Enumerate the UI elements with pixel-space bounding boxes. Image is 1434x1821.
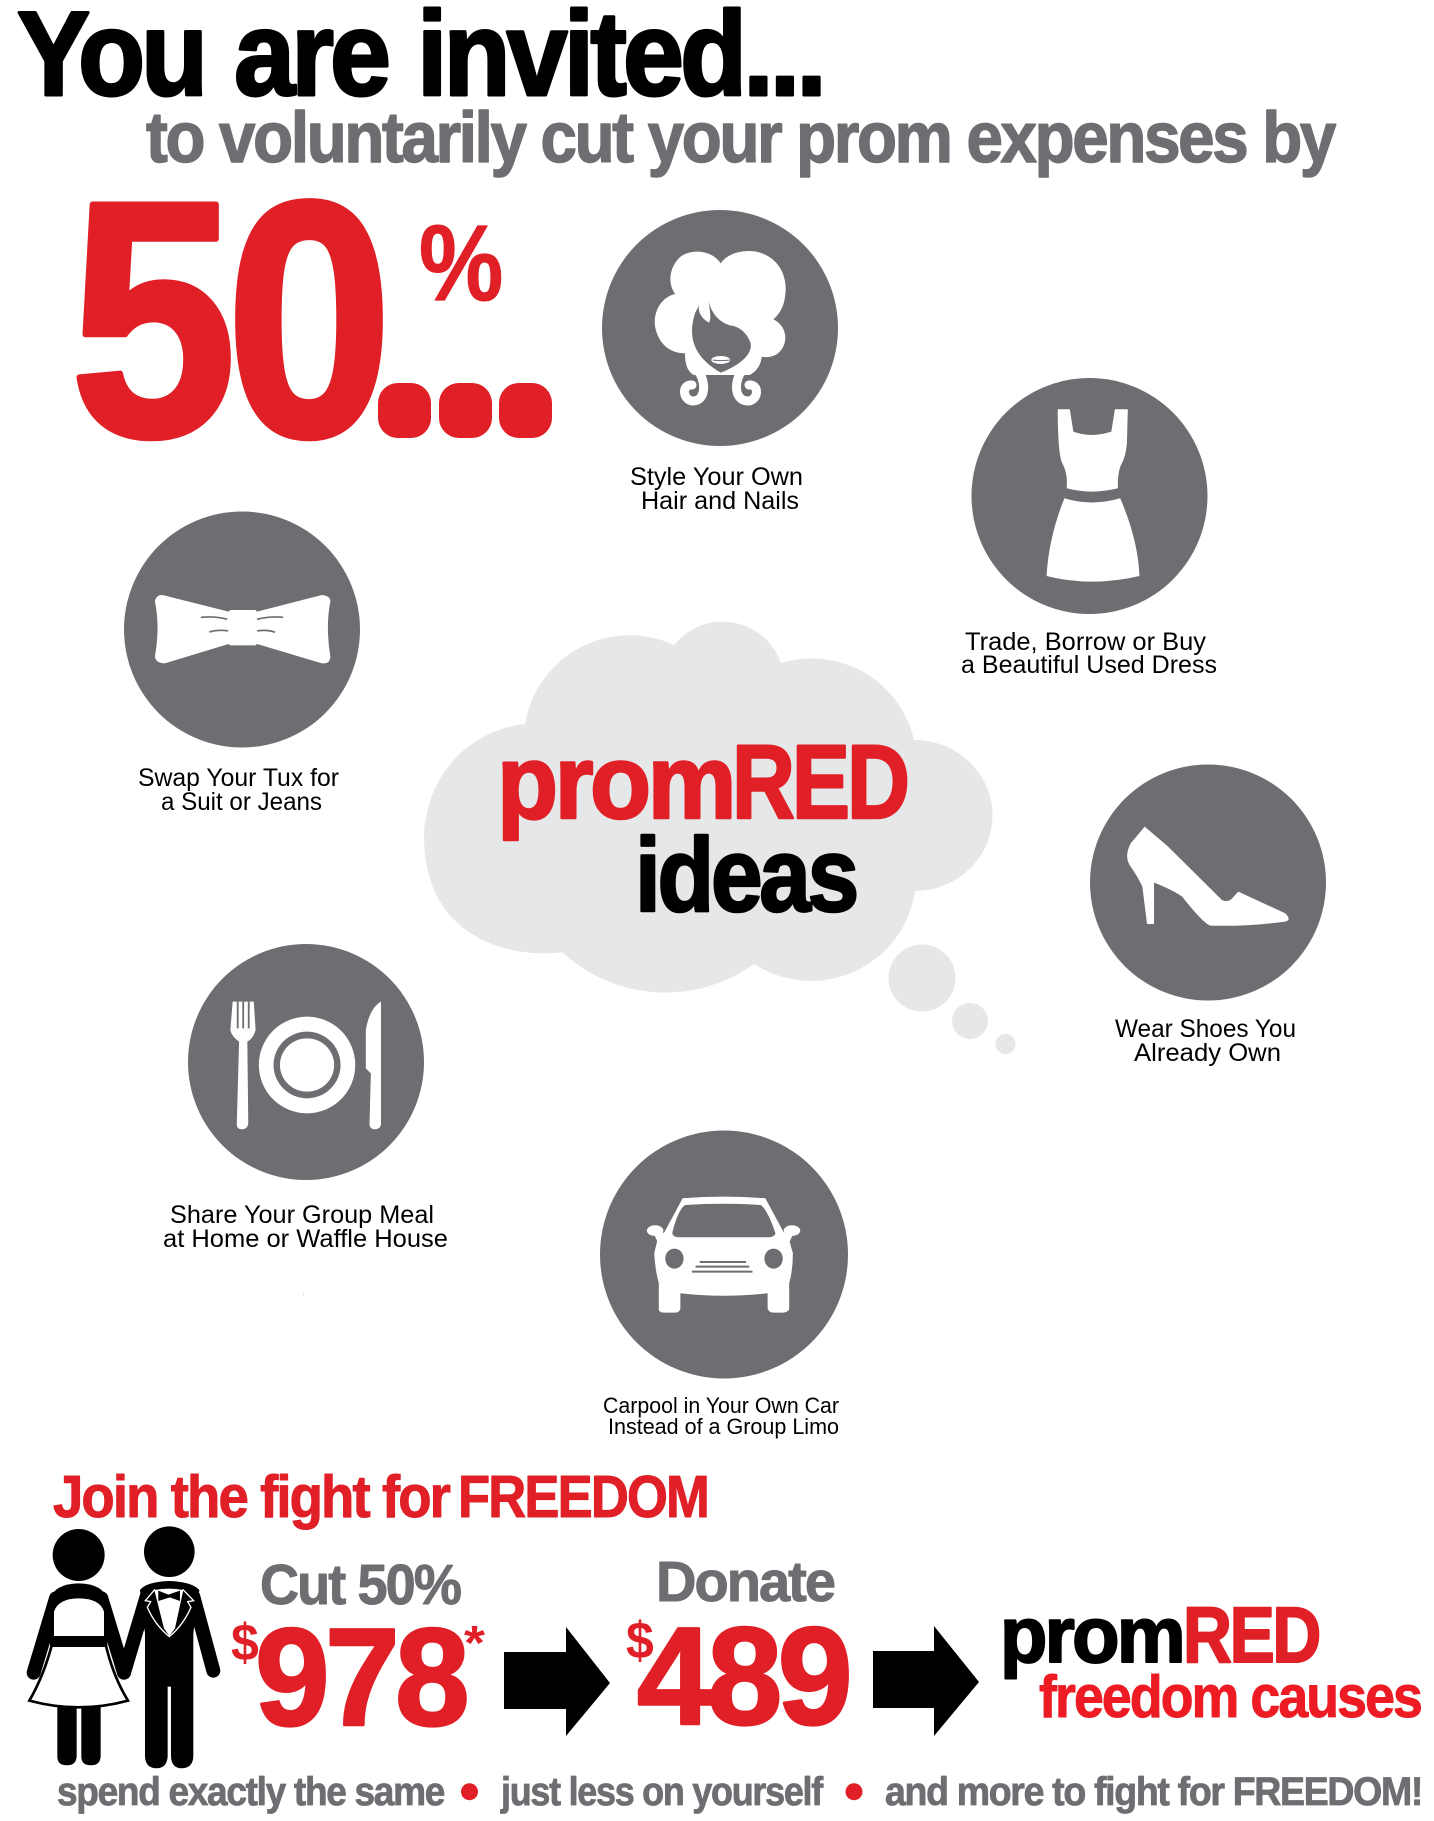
label: Swap Your Tux for <box>138 764 339 792</box>
label: Carpool in Your Own Car <box>603 1393 839 1418</box>
idea: group meal <box>163 944 448 1253</box>
bottom tagline: spend exactly the same <box>57 1770 444 1814</box>
idea: shoes <box>1090 764 1326 1067</box>
icon: plate and cutlery <box>230 1002 381 1129</box>
idea: carpool <box>600 1130 848 1439</box>
thought cloud <box>424 622 1016 1054</box>
label <box>138 764 339 816</box>
label <box>163 1201 448 1253</box>
cloud heading: promRED: prom <box>497 724 733 841</box>
label: Trade, Borrow or Buy <box>965 628 1206 656</box>
cloud heading: ideas: ideas <box>635 817 856 934</box>
big statistic: 50%...: % <box>419 202 502 323</box>
cut 50% block <box>231 1553 485 1755</box>
label <box>961 628 1217 679</box>
man <box>124 1526 213 1768</box>
section heading: join the fight <box>53 1464 708 1530</box>
section heading: join the fight: Join the fight for <box>53 1464 451 1530</box>
promRED freedom causes logo: prom <box>1000 1590 1183 1679</box>
icon: high heel <box>1127 827 1289 926</box>
label: Style Your Own <box>630 463 803 491</box>
icon: couple <box>29 1526 213 1768</box>
label <box>630 463 803 515</box>
label: Already Own <box>1134 1039 1281 1067</box>
label: Share Your Group Meal <box>170 1201 434 1229</box>
label: Hair and Nails <box>641 487 799 515</box>
icon: bow tie <box>155 595 330 663</box>
idea: used dress <box>961 378 1217 679</box>
price: 978: * <box>464 1617 485 1670</box>
label <box>1115 1015 1296 1067</box>
donate block: Donate <box>656 1550 834 1614</box>
donate block <box>626 1550 849 1754</box>
icon: car <box>647 1197 800 1313</box>
cut 50% block: Cut 50% <box>260 1553 461 1617</box>
cloud heading: promRED: RED <box>732 724 907 841</box>
label: Instead of a Group Limo <box>608 1414 839 1439</box>
arrow: cut to donate <box>504 1627 610 1736</box>
promRED freedom causes logo: RED <box>1183 1590 1319 1679</box>
price: 978: $ <box>231 1614 259 1672</box>
price: 978: 978 <box>255 1600 466 1755</box>
promRED freedom causes logo <box>1000 1590 1421 1730</box>
woman <box>29 1529 128 1765</box>
icon: dress <box>1047 409 1139 582</box>
price: 489: $ <box>626 1612 654 1670</box>
label: at Home or Waffle House <box>163 1225 448 1253</box>
bottom tagline: just less on yourself <box>500 1770 824 1814</box>
idea: hair and nails <box>602 210 838 515</box>
price: 489: 489 <box>637 1599 849 1754</box>
big statistic: 50%...: 50 <box>70 132 382 506</box>
cloud heading: promRED <box>497 724 907 841</box>
section heading: join the fight: FREEDOM <box>458 1464 708 1530</box>
label: Wear Shoes You <box>1115 1015 1296 1043</box>
icon: woman's hair <box>655 251 786 401</box>
subtitle: to voluntarily cut your prom expenses by <box>146 99 1337 178</box>
label: a Suit or Jeans <box>161 788 322 816</box>
label: a Beautiful Used Dress <box>961 651 1217 679</box>
label <box>603 1393 839 1439</box>
bottom tagline <box>57 1770 1422 1814</box>
arrow: donate to causes <box>873 1626 979 1736</box>
idea: swap tux <box>124 512 360 816</box>
